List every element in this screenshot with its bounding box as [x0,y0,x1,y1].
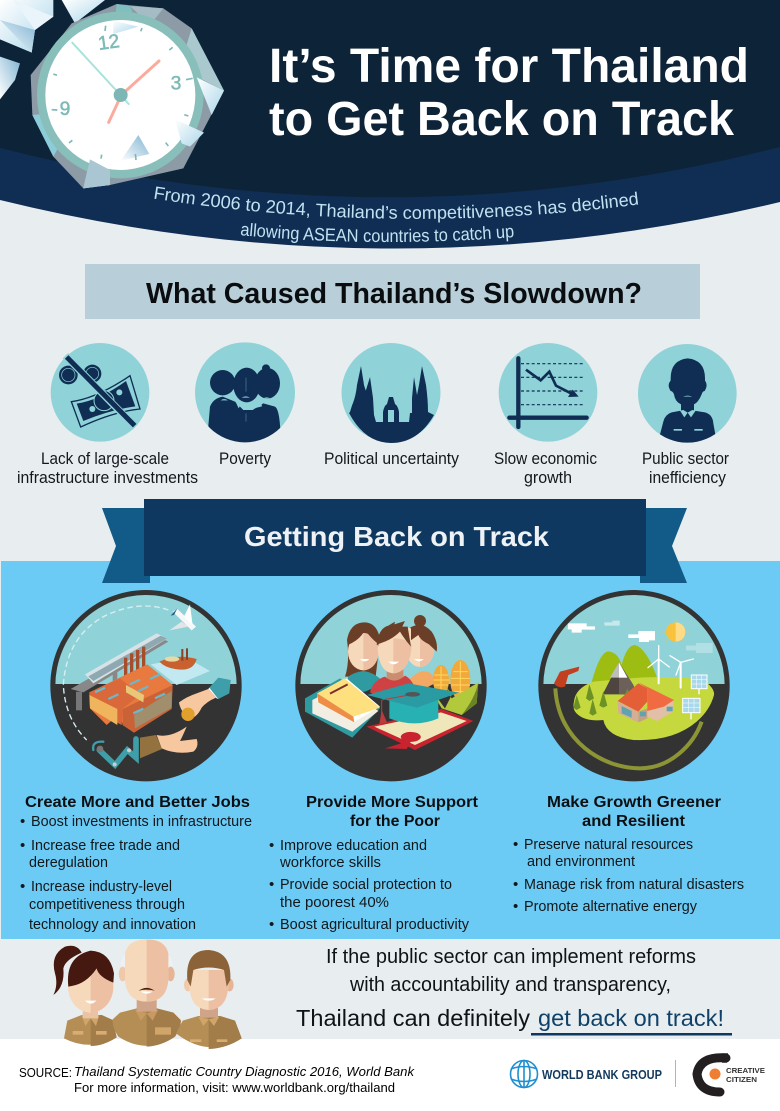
house [618,682,674,722]
heading: What Caused Thailand's Slowdown: What Caused Thailand’s Slowdown? [146,278,642,310]
column: support for the poor: the poorest 40% [280,894,389,911]
clock numbers: 9 [60,99,70,120]
clock gem body [31,4,224,188]
icon: poor family silhouettes [195,342,295,445]
civil servant: older man [113,939,181,1047]
clouds [568,621,713,653]
island [573,677,714,740]
robot arm [93,739,136,766]
closing statement: get back on track! [538,1005,724,1031]
subtitle: From 2006 to 2014, Thailand’s competitiveness has declined [154,186,638,222]
clock numbers [60,31,181,120]
airplane [169,604,196,630]
source note: For more information, visit: www.worldbank.org/thailand [74,1080,395,1095]
column: jobs: Increase free trade and [31,837,180,854]
panel: getting back on track [1,499,780,939]
footer white band [0,1039,780,1111]
column: support for the poor: Boost agricultural productivity [280,916,469,933]
column: support for the poor: Provide More Support [306,794,479,811]
logo: Creative Citizen: CREATIVE [726,1066,765,1075]
cause: public sector inefficiency [638,344,737,487]
clock ticks [52,26,193,160]
civil servant: woman [53,946,117,1046]
flight path [63,606,168,740]
fuel nozzle and hose [554,667,702,768]
illustration: civil servants [53,939,242,1049]
cause: slow economic growth [494,343,597,487]
closing statement: If the public sector can implement reforms [326,946,696,968]
column: jobs: Increase industry-level [31,878,172,895]
clock face shards [83,21,224,188]
column: greener growth: • [513,876,518,893]
source note: SOURCE: [19,1066,72,1080]
graduation cap [367,683,459,724]
column: support for the poor: Provide social protection to [280,876,452,893]
illustration: jobs [50,590,243,781]
label [17,450,198,487]
column: jobs: Create More and Better Jobs [25,794,250,811]
heading: What Caused Thailand's Slowdown [85,264,700,319]
column: greener growth: and environment [527,853,636,870]
column: greener growth: Make Growth Greener [547,794,721,811]
title [269,40,749,146]
mountain [603,662,637,694]
column: greener growth [513,794,744,915]
civil servant: young man [176,950,242,1049]
label: Political uncertainty [324,450,460,468]
column: support for the poor: Improve education and [280,837,427,854]
label: Lack of large-scale [41,450,169,468]
column: jobs: • [20,813,25,830]
column: greener growth: Manage risk from natural disasters [524,876,744,893]
column: greener growth: • [513,836,518,853]
label: inefficiency [649,469,727,487]
column: jobs: technology and innovation [29,916,196,933]
column: greener growth: • [513,898,518,915]
wind turbines [648,646,693,688]
column: jobs: deregulation [29,854,108,871]
column: support for the poor: • [269,837,274,854]
subtitle [154,186,638,243]
divider [675,1060,676,1087]
solar panels [683,675,707,719]
column: support for the poor: • [269,876,274,893]
icon: broken clock [0,0,224,188]
column: jobs: competitiveness through [29,896,185,913]
label [494,450,597,487]
hand with coin [179,678,231,721]
hand receiving [140,727,197,758]
books [305,678,380,738]
icon: globe [510,1060,538,1088]
corn [427,660,478,715]
cause: lack of infrastructure investments [17,343,198,487]
icon: hand C mark [697,1054,729,1092]
logo: World Bank Group [510,1060,662,1088]
ribbon heading: Getting Back on Track [244,521,549,552]
sun [663,618,689,646]
clock numbers: 12 [97,31,121,55]
source note [19,1064,416,1095]
column: support for the poor: • [269,916,274,933]
label: Slow economic [494,450,597,468]
column: greener growth: Preserve natural resources [524,836,693,853]
column: support for the poor: for the Poor [350,813,440,830]
closing statement [296,946,732,1036]
logo: Creative Citizen: CITIZEN [726,1075,757,1084]
label: growth [524,469,572,487]
clock ring and face [37,12,204,178]
three children [345,615,437,700]
column: greener growth: Promote alternative energy [524,898,697,915]
subtitle: allowing ASEAN countries to catch up [240,223,514,243]
closing statement: Thailand can definitely [296,1005,530,1031]
column: jobs [20,794,252,933]
clock hands [72,43,159,122]
illustration: support for the poor [295,590,488,781]
icon: civil servant silhouette [638,344,737,443]
logo: World Bank Group: WORLD BANK GROUP [542,1068,662,1082]
column: jobs: • [20,878,25,895]
icon: Thai monument silhouette [342,343,440,443]
title: It’s Time for Thailand [269,40,749,93]
label [642,450,729,487]
column: greener growth: and Resilient [582,813,686,830]
icon: crossed out money [51,343,149,442]
icon: falling line chart [499,343,597,442]
factory [89,647,173,733]
ribbon heading [102,499,687,583]
column: jobs: Boost investments in infrastructure [31,813,252,830]
column: support for the poor [269,794,479,933]
source note: Thailand Systematic Country Diagnostic 2016, World Bank [74,1064,416,1079]
clock shards [0,0,105,99]
cause: political uncertainty [324,343,460,468]
diploma [367,709,473,750]
elevated train [71,633,168,710]
logo: Creative Citizen [697,1054,765,1092]
header banner [0,0,780,249]
hills [590,645,657,692]
label: Poverty [219,450,272,468]
cargo ship on water [151,648,210,685]
closing statement: with accountability and transparency, [349,974,671,996]
clock numbers: 3 [171,73,181,94]
label: infrastructure investments [17,469,198,487]
trees [573,684,631,716]
column: jobs: • [20,837,25,854]
column: support for the poor: workforce skills [279,854,381,871]
label: Public sector [642,450,729,468]
cause: poverty [195,342,295,468]
title: to Get Back on Track [269,93,734,146]
illustration: greener growth [538,590,732,781]
